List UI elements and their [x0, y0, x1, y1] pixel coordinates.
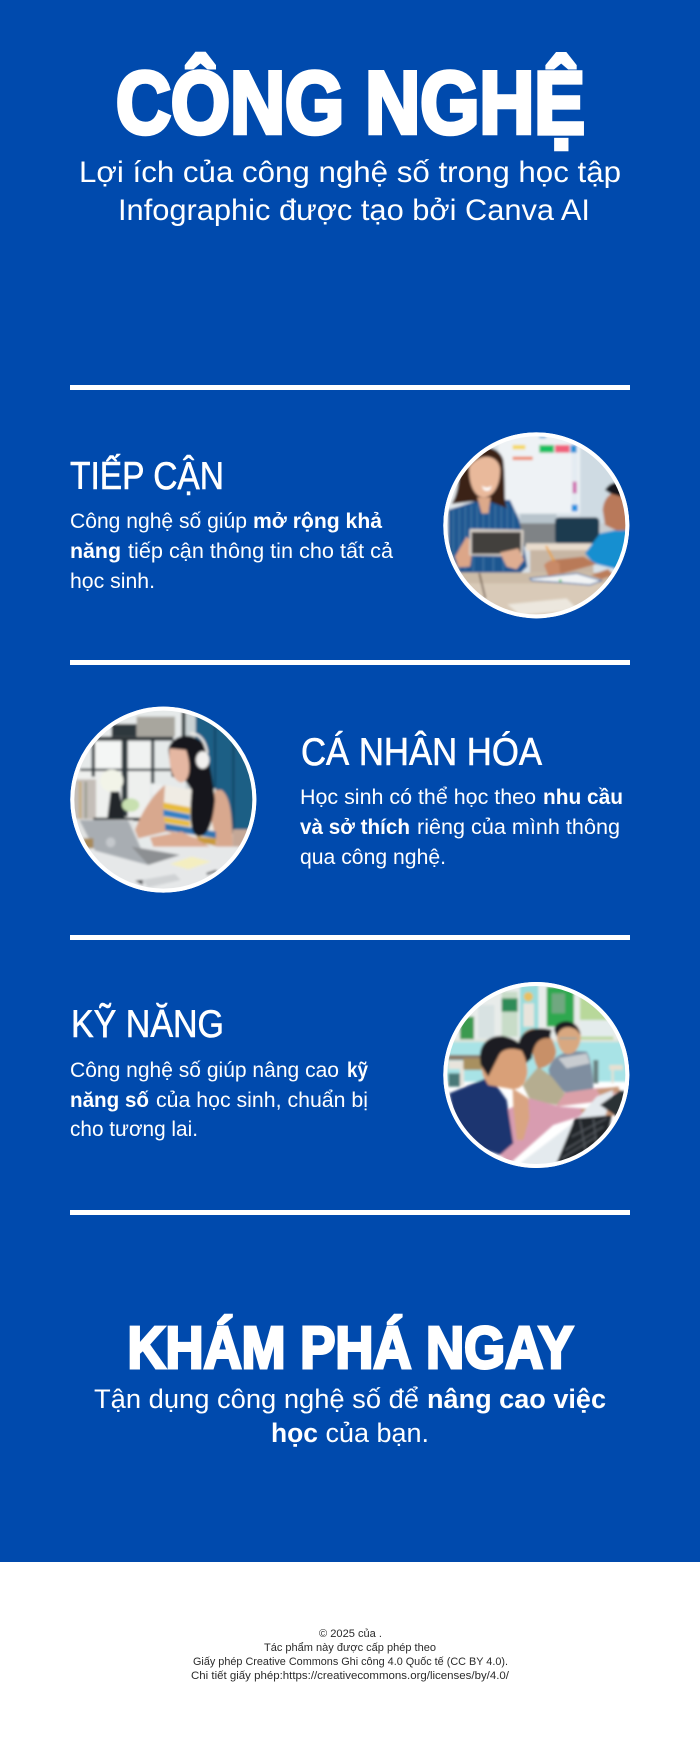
heading: cá nhân hóa: CÁ NHÂN HÓA	[301, 731, 542, 774]
photo: students at a computer	[443, 982, 630, 1168]
footer: license credit: © 2025 của .	[319, 1628, 382, 1640]
text block: call to action	[94, 1384, 606, 1448]
text block: tiếp cận: tiếp cận thông tin cho tất cả	[128, 540, 393, 563]
panel: cá nhân hóa	[68, 705, 623, 897]
panel: tiếp cận	[70, 430, 633, 623]
subtitle	[79, 156, 621, 227]
text block: call to action: nâng cao việc	[427, 1384, 606, 1414]
text block: tiếp cận: học sinh.	[70, 570, 155, 593]
text block: call to action: của bạn.	[326, 1418, 429, 1448]
text block: cá nhân hóa: Học sinh có thể học theo	[300, 786, 536, 809]
text block: kỹ năng: Công nghệ số giúp nâng cao	[70, 1059, 339, 1082]
text block: cá nhân hóa: qua công nghệ.	[300, 846, 446, 869]
footer: license credit	[191, 1628, 510, 1682]
heading: tiếp cận: TIẾP CẬN	[70, 454, 224, 498]
subtitle: Infographic được tạo bởi Canva AI	[118, 194, 590, 227]
footer: license credit: Chi tiết giấy phép:https://creativecommons.org/licenses/by/4.0/	[191, 1670, 510, 1682]
panel: kỹ năng	[70, 982, 633, 1183]
heading: kỹ năng: KỸ NĂNG	[71, 1003, 224, 1046]
text block: cá nhân hóa: riêng của mình thông	[417, 816, 620, 839]
subtitle: Lợi ích của công nghệ số trong học tập	[79, 156, 621, 189]
text block: cá nhân hóa: và sở thích	[300, 816, 410, 839]
text block: cá nhân hóa: nhu cầu	[543, 786, 623, 809]
heading: khám phá ngay: KHÁM PHÁ NGAY	[128, 1315, 574, 1381]
text block: tiếp cận: mở rộng khả	[253, 510, 382, 533]
text block: call to action: học	[271, 1418, 318, 1448]
text block: cá nhân hóa	[300, 786, 623, 869]
text block: call to action: Tận dụng công nghệ số để	[94, 1384, 419, 1414]
title: CÔNG NGHỆ	[116, 53, 585, 152]
text block: kỹ năng	[70, 1059, 368, 1141]
text block: kỹ năng: năng số	[70, 1089, 149, 1112]
text block: kỹ năng: của học sinh, chuẩn bị	[156, 1089, 368, 1112]
footer: license credit: Tác phẩm này được cấp phép theo	[264, 1642, 436, 1654]
photo: teacher with tablet and student	[440, 430, 633, 623]
text block: tiếp cận	[70, 510, 393, 593]
photo: student with laptop and headphones	[68, 705, 259, 897]
text block: tiếp cận: Công nghệ số giúp	[70, 510, 247, 533]
text block: kỹ năng: cho tương lai.	[70, 1118, 198, 1141]
footer: license credit: Giấy phép Creative Commons Ghi công 4.0 Quốc tế (CC BY 4.0).	[193, 1656, 508, 1668]
text block: kỹ năng: kỹ	[347, 1059, 368, 1082]
text block: tiếp cận: năng	[70, 540, 121, 563]
